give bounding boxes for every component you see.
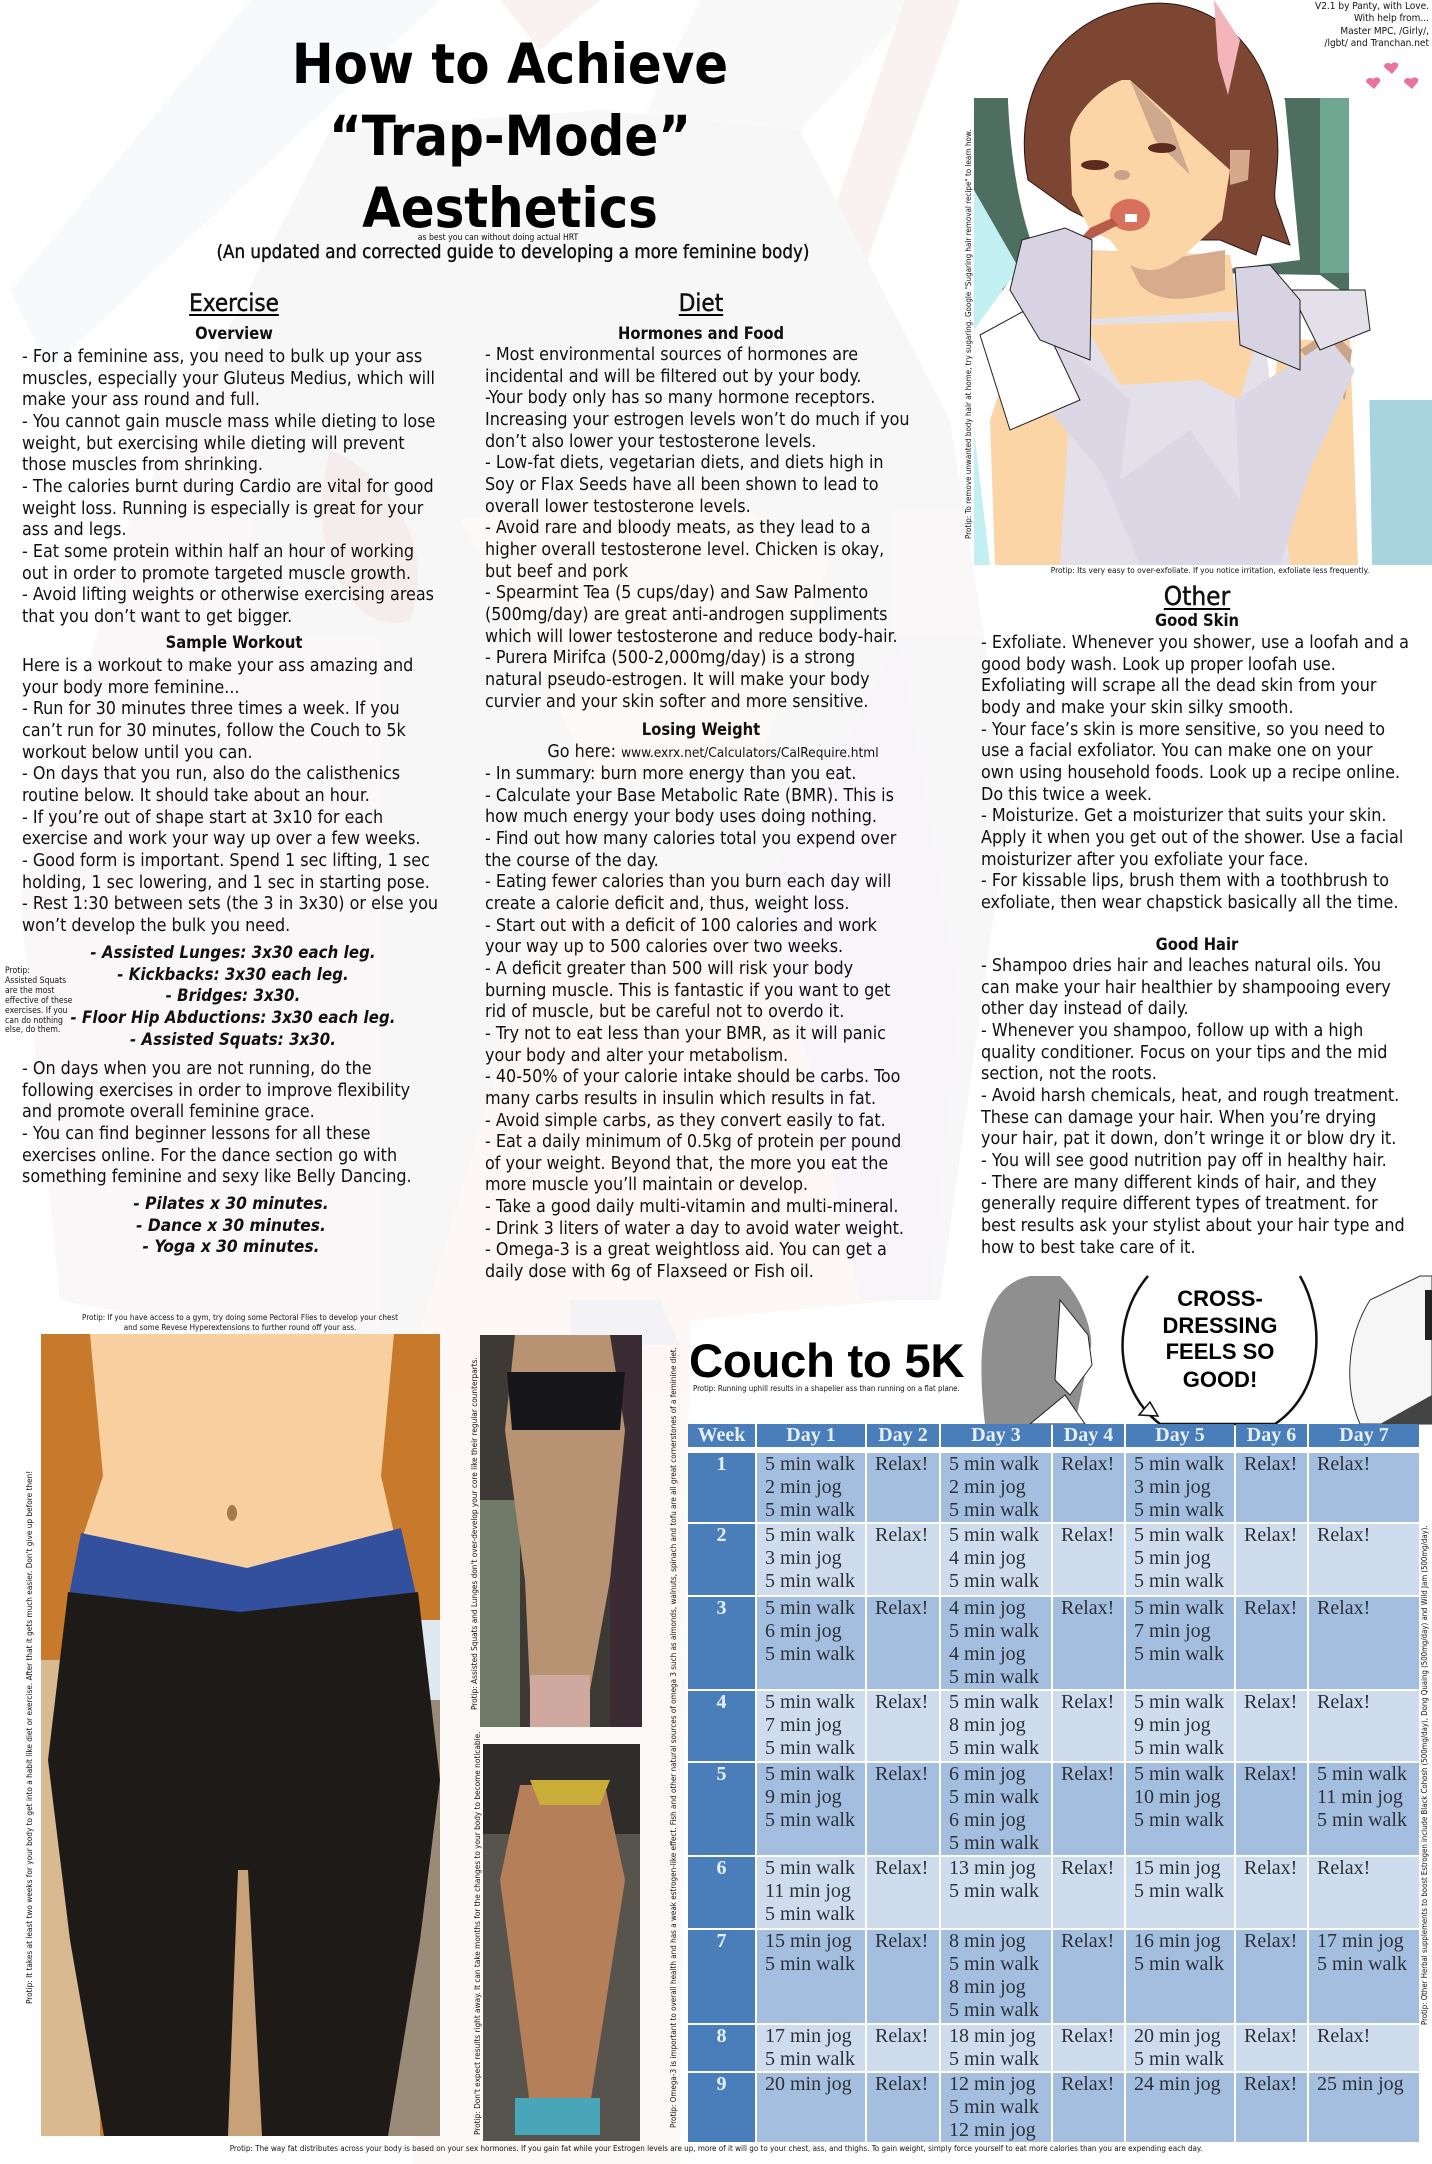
table: Couch to 5K schedule: 4 min jog 5 min walk 4 min jog 5 min walk xyxy=(949,1597,1039,1688)
credits: V2.1 by Panty, with Love. With help from... Master MPC, /Girly/, /lgbt/ and Tranchan.net xyxy=(1315,1,1429,49)
protip: fat distribution: Protip: The way fat distributes across your body is based on your sex hormones. If you gain fat while your Estrogen levels are up, more of it will go to your chest, ass, and thighs. To gain weight, simply force yourself to eat more calories than you are expending each day. xyxy=(230,2144,1202,2153)
manga panel: characters with speech bubble: GOOD! xyxy=(1183,1367,1257,1392)
table: Couch to 5K schedule: Week xyxy=(698,1424,745,1446)
table: Couch to 5K schedule: 9 xyxy=(716,2073,726,2095)
table: Couch to 5K schedule: 5 min walk 3 min jog 5 min walk xyxy=(765,1524,855,1592)
table: Couch to 5K schedule: Relax! xyxy=(1061,2073,1114,2095)
table: Couch to 5K schedule: Relax! xyxy=(875,1691,928,1713)
table: Couch to 5K schedule: 20 min jog xyxy=(765,2073,852,2095)
table: Couch to 5K schedule xyxy=(688,1424,1419,2142)
manga panel: characters with speech bubble: FEELS SO xyxy=(1166,1339,1274,1364)
table: Couch to 5K schedule: Relax! xyxy=(1061,1597,1114,1619)
table: Couch to 5K schedule: 6 min jog 5 min walk 6 min jog 5 min walk xyxy=(949,1763,1039,1854)
table: Couch to 5K schedule: Relax! xyxy=(1317,1857,1370,1879)
table: Couch to 5K schedule: Day 2 xyxy=(878,1424,928,1446)
text: hormones and food: - Most environmental sources of hormones are incidental and will be filtered out by your body. -Your body only has so many hormone receptors. Increasing your estrogen levels won’t do much if you don’t also lower your testosterone levels. - Low-fat diets, vegetarian diets, and diets high in Soy or Flax Seeds have all been shown to lead to overall lower testosterone levels. - Avoid rare and bloody meats, as they lead to a higher overall testosterone level. Chicken is okay, but beef and pork - Spearmint Tea (5 cups/day) and Saw Palmento (500mg/day) are great anti-androgen suppliments which will lower testosterone and reduce body-hair. - Purera Mirifca (500-2,000mg/day) is a strong natural pseudo-estrogen. It will make your body curvier and your skin softer and more sensitive. xyxy=(485,344,910,712)
table: Couch to 5K schedule: 5 xyxy=(716,1763,726,1785)
table: Couch to 5K schedule: Relax! xyxy=(1244,1691,1297,1713)
heading: Hormones and Food: Hormones and Food xyxy=(618,324,784,343)
table: Couch to 5K schedule: Relax! xyxy=(1061,1857,1114,1879)
text: losing weight: - In summary: burn more energy than you eat. - Calculate your Base Metabolic Rate (BMR). This is how much energy your body uses doing nothing. - Find out how many calories total you expend over the course of the day. - Eating fewer calories than you burn each day will create a calorie deficit and, thus, weight loss. - Start out with a deficit of 100 calories and work your way up to 500 calories over two weeks. - A deficit greater than 500 will risk your body burning muscle. This is fantastic if you want to get rid of muscle, but be careful not to overdo it. - Try not to eat less than your BMR, as it will panic your body and alter your metabolism. - 40-50% of your calorie intake should be carbs. Too many carbs results in insulin which results in fat. - Avoid simple carbs, as they convert easily to fat. - Eat a daily minimum of 0.5kg of protein per pound of your weight. Beyond that, the more you eat the more muscle you’ll maintain or develop. - Take a good daily multi-vitamin and multi-mineral. - Drink 3 liters of water a day to avoid water weight. - Omega-3 is a great weightloss aid. You can get a daily dose with 6g of Flaxseed or Fish oil. xyxy=(485,763,904,1282)
table: Couch to 5K schedule: Relax! xyxy=(875,1453,928,1475)
table: Couch to 5K schedule: 25 min jog xyxy=(1317,2073,1404,2095)
table: Couch to 5K schedule: Relax! xyxy=(1317,1597,1370,1619)
heading: Good Hair: Good Hair xyxy=(1156,935,1238,954)
table: Couch to 5K schedule: 5 min walk 7 min jog 5 min walk xyxy=(1134,1597,1224,1665)
table: Couch to 5K schedule: Relax! xyxy=(1244,1597,1297,1619)
protip: results: Protip: Don't expect results right away. It can take months for the changes to your body to become noticable. xyxy=(472,1732,482,2135)
protip: habit: Protip: It takes at least two weeks for your body to get into a habit like diet or exercise. After that it gets much easier. Don't give up before then! xyxy=(24,1471,34,2004)
table: Couch to 5K schedule: 15 min jog 5 min walk xyxy=(765,1930,855,1975)
table: Couch to 5K schedule: 8 xyxy=(716,2025,726,2047)
link: calorie calculator: Go here: www.exrx.net/Calculators/CalRequire.html xyxy=(547,741,879,762)
table: Couch to 5K schedule: 6 xyxy=(716,1857,726,1879)
table: Couch to 5K schedule: 2 xyxy=(716,1524,726,1546)
table: Couch to 5K schedule: Relax! xyxy=(1061,2025,1114,2047)
table: Couch to 5K schedule: 3 xyxy=(716,1597,726,1619)
table: Couch to 5K schedule: Relax! xyxy=(875,1763,928,1785)
table: Couch to 5K schedule: Day 1 xyxy=(786,1424,836,1446)
table: Couch to 5K schedule: Relax! xyxy=(875,2073,928,2095)
table: Couch to 5K schedule: Relax! xyxy=(1317,1524,1370,1546)
heading: Other: Other xyxy=(1164,582,1230,612)
table: Couch to 5K schedule: Relax! xyxy=(1244,1930,1297,1952)
table: Couch to 5K schedule: Relax! xyxy=(875,1524,928,1546)
table: Couch to 5K schedule: 5 min walk 8 min jog 5 min walk xyxy=(949,1691,1039,1759)
table: Couch to 5K schedule: Relax! xyxy=(1244,1524,1297,1546)
table: Couch to 5K schedule: 5 min walk 6 min jog 5 min walk xyxy=(765,1597,855,1665)
list: flexibility exercises: - Pilates x 30 minutes. - Dance x 30 minutes. - Yoga x 30 minutes. xyxy=(133,1194,329,1257)
table: Couch to 5K schedule: Relax! xyxy=(1061,1453,1114,1475)
table: Couch to 5K schedule: 4 xyxy=(716,1691,726,1713)
protip: exfoliation: Protip: Its very easy to over-exfoliate. If you notice irritation, exfoliate less frequently. xyxy=(1051,565,1369,575)
icon: hearts xyxy=(1366,62,1418,89)
table: Couch to 5K schedule: 20 min jog 5 min walk xyxy=(1134,2025,1224,2070)
protip: herbal supplements: Protip: Other Herbal supplements to boost Estrogen include Black Cohosh (500mg/day), Dong Quaing (500mg/day) and Wild Jam (500mg/day). xyxy=(1420,1525,1429,2025)
manga panel: characters with speech bubble: DRESSING xyxy=(1163,1313,1277,1338)
protip: omega-3: Protip: Omega-3 is important to overall health and has a weak estrogen-like effect. Fish and other natural sources of omega 3 such as almonds, walnuts, spinach and tofu are all great cornerstones of a feminine diet. xyxy=(669,1347,678,2128)
text: good skin: - Exfoliate. Whenever you shower, use a loofah and a good body wash. Look up proper loofah use. Exfoliating will scrape all the dead skin from your body and make your skin silky smooth. - Your face’s skin is more sensitive, so you need to use a facial exfoliator. You can make one on your own using household foods. Look up a recipe online. Do this twice a week. - Moisturize. Get a moisturizer that suits your skin. Apply it when you get out of the shower. Use a facial moisturizer after you exfoliate your face. - For kissable lips, brush them with a toothbrush to exfoliate, then wear chapstick basically all the time. xyxy=(981,632,1409,913)
table: Couch to 5K schedule: Relax! xyxy=(1244,1453,1297,1475)
table: Couch to 5K schedule: 17 min jog 5 min walk xyxy=(1317,1930,1407,1975)
table: Couch to 5K schedule: 18 min jog 5 min walk xyxy=(949,2025,1039,2070)
table: Couch to 5K schedule: 5 min walk 2 min jog 5 min walk xyxy=(765,1453,855,1521)
protip: body hair: Protip: To remove unwanted body hair at home, try sugaring. Google "Sugaring hair removal recipe" to learn how. xyxy=(964,130,973,539)
table: Couch to 5K schedule: Relax! xyxy=(875,1857,928,1879)
table: Couch to 5K schedule: Relax! xyxy=(875,2025,928,2047)
table: Couch to 5K schedule: Relax! xyxy=(1061,1691,1114,1713)
table: Couch to 5K schedule: Relax! xyxy=(1244,1763,1297,1785)
table: Couch to 5K schedule: 7 xyxy=(716,1930,726,1952)
tagline: as best you can without doing actual HRT xyxy=(418,233,578,243)
heading: Diet: Diet xyxy=(679,289,723,317)
protip: assisted squats: Protip: Assisted Squats are the most effective of these exercises. If you can do nothing else, do them. xyxy=(5,966,72,1035)
heading: Good Skin: Good Skin xyxy=(1155,611,1239,630)
table: Couch to 5K schedule: 5 min walk 9 min jog 5 min walk xyxy=(765,1763,855,1831)
table: Couch to 5K schedule: 1 xyxy=(716,1453,726,1475)
heading: Couch to 5K: Couch to 5K xyxy=(689,1335,964,1388)
list: glute exercises: - Assisted Lunges: 3x30 each leg. - Kickbacks: 3x30 each leg. - Bridges: 3x30. - Floor Hip Abductions: 3x30 each leg. - Assisted Squats: 3x30. xyxy=(70,943,396,1049)
table: Couch to 5K schedule: Day 4 xyxy=(1064,1424,1113,1446)
table: Couch to 5K schedule: 5 min walk 5 min jog 5 min walk xyxy=(1134,1524,1224,1592)
heading: Exercise: Exercise xyxy=(189,289,279,317)
table: Couch to 5K schedule: Day 7 xyxy=(1339,1424,1389,1446)
table: Couch to 5K schedule: Relax! xyxy=(1061,1763,1114,1785)
protip: running uphill: Protip: Running uphill results in a shapelier ass than running on a flat plane. xyxy=(693,1384,960,1393)
table: Couch to 5K schedule: 16 min jog 5 min walk xyxy=(1134,1930,1224,1975)
heading: Losing Weight: Losing Weight xyxy=(642,720,760,739)
table: Couch to 5K schedule: 24 min jog xyxy=(1134,2073,1221,2095)
table: Couch to 5K schedule: Day 5 xyxy=(1155,1424,1205,1446)
table: Couch to 5K schedule: Relax! xyxy=(1244,1857,1297,1879)
table: Couch to 5K schedule: 5 min walk 11 min jog 5 min walk xyxy=(765,1857,855,1925)
table: Couch to 5K schedule: Relax! xyxy=(1317,2025,1370,2047)
table: Couch to 5K schedule: Relax! xyxy=(1061,1930,1114,1952)
table: Couch to 5K schedule: 13 min jog 5 min walk xyxy=(949,1857,1039,1902)
table: Couch to 5K schedule: Day 6 xyxy=(1247,1424,1296,1446)
heading: Overview: Overview xyxy=(195,324,273,343)
table: Couch to 5K schedule: 8 min jog 5 min walk 8 min jog 5 min walk xyxy=(949,1930,1039,2021)
table: Couch to 5K schedule: 12 min jog 5 min walk 12 min jog xyxy=(949,2073,1039,2141)
table: Couch to 5K schedule: 5 min walk 4 min jog 5 min walk xyxy=(949,1524,1039,1592)
table: Couch to 5K schedule: Relax! xyxy=(1061,1524,1114,1546)
table: Couch to 5K schedule: 15 min jog 5 min walk xyxy=(1134,1857,1224,1902)
subtitle: (An updated and corrected guide to developing a more feminine body) xyxy=(217,242,809,263)
table: Couch to 5K schedule: 5 min walk 11 min jog 5 min walk xyxy=(1317,1763,1407,1831)
table: Couch to 5K schedule: 5 min walk 9 min jog 5 min walk xyxy=(1134,1691,1224,1759)
table: Couch to 5K schedule: 5 min walk 7 min jog 5 min walk xyxy=(765,1691,855,1759)
protip: gym: Protip: If you have access to a gym, try doing some Pectoral Flies to develop your chest and some Revese Hyperextensions to further round off your ass. xyxy=(82,1313,398,1332)
table: Couch to 5K schedule: 17 min jog 5 min walk xyxy=(765,2025,855,2070)
heading: Sample Workout: Sample Workout xyxy=(166,633,302,652)
table: Couch to 5K schedule: 5 min walk 3 min jog 5 min walk xyxy=(1134,1453,1224,1521)
table: Couch to 5K schedule: Day 3 xyxy=(971,1424,1021,1446)
text: exercise overview: - For a feminine ass, you need to bulk up your ass muscles, especially your Gluteus Medius, which will make your ass round and full. - You cannot gain muscle mass while dieting to lose weight, but exercising while dieting will prevent those muscles from shrinking. - The calories burnt during Cardio are vital for good weight loss. Running is especially is great for your ass and legs. - Eat some protein within half an hour of working out in order to promote targeted muscle growth. - Avoid lifting weights or otherwise exercising areas that you don’t want to get bigger. xyxy=(22,346,435,627)
table: Couch to 5K schedule: Relax! xyxy=(1244,2073,1297,2095)
table: Couch to 5K schedule: 5 min walk 10 min jog 5 min walk xyxy=(1134,1763,1224,1831)
table: Couch to 5K schedule: Relax! xyxy=(875,1930,928,1952)
table: Couch to 5K schedule: Relax! xyxy=(1317,1453,1370,1475)
title: How to Achieve “Trap-Mode” Aesthetics xyxy=(292,32,728,241)
manga panel: characters with speech bubble: CROSS- xyxy=(1177,1286,1263,1311)
table: Couch to 5K schedule: Relax! xyxy=(1244,2025,1297,2047)
table: Couch to 5K schedule: Relax! xyxy=(1317,1691,1370,1713)
text: sample workout: Here is a workout to make your ass amazing and your body more feminine... - Run for 30 minutes three times a week. If you can’t run for 30 minutes, follow the Couch to 5k workout below until you can. - On days that you run, also do the calisthenics routine below. It should take about an hour. - If you’re out of shape start at 3x10 for each exercise and work your way up over a few weeks. - Good form is important. Spend 1 sec lifting, 1 sec holding, 1 sec lowering, and 1 sec in starting pose. - Rest 1:30 between sets (the 3 in 3x30) or else you won’t develop the bulk you need. xyxy=(22,655,438,936)
protip: squats: Protip: Assisted Squats and Lunges don't over-develop your core like their regular counterparts. xyxy=(469,1357,479,1710)
text: non-running days: - On days when you are not running, do the following exercises in order to improve flexibility and promote overall feminine grace. - You can find beginner lessons for all these exercises online. For the dance section go with something feminine and sexy like Belly Dancing. xyxy=(22,1058,412,1187)
table: Couch to 5K schedule: Relax! xyxy=(875,1597,928,1619)
text: good hair: - Shampoo dries hair and leaches natural oils. You can make your hair healthier by shampooing every other day instead of daily. - Whenever you shampoo, follow up with a high quality conditioner. Focus on your tips and the mid section, not the roots. - Avoid harsh chemicals, heat, and rough treatment. These can damage your hair. When you’re drying your hair, pat it down, don’t wringe it or blow dry it. - You will see good nutrition pay off in healthy hair. - There are many different kinds of hair, and they generally require different types of treatment. for best results ask your stylist about your hair type and how to best take care of it. xyxy=(981,955,1405,1258)
table: Couch to 5K schedule: 5 min walk 2 min jog 5 min walk xyxy=(949,1453,1039,1521)
